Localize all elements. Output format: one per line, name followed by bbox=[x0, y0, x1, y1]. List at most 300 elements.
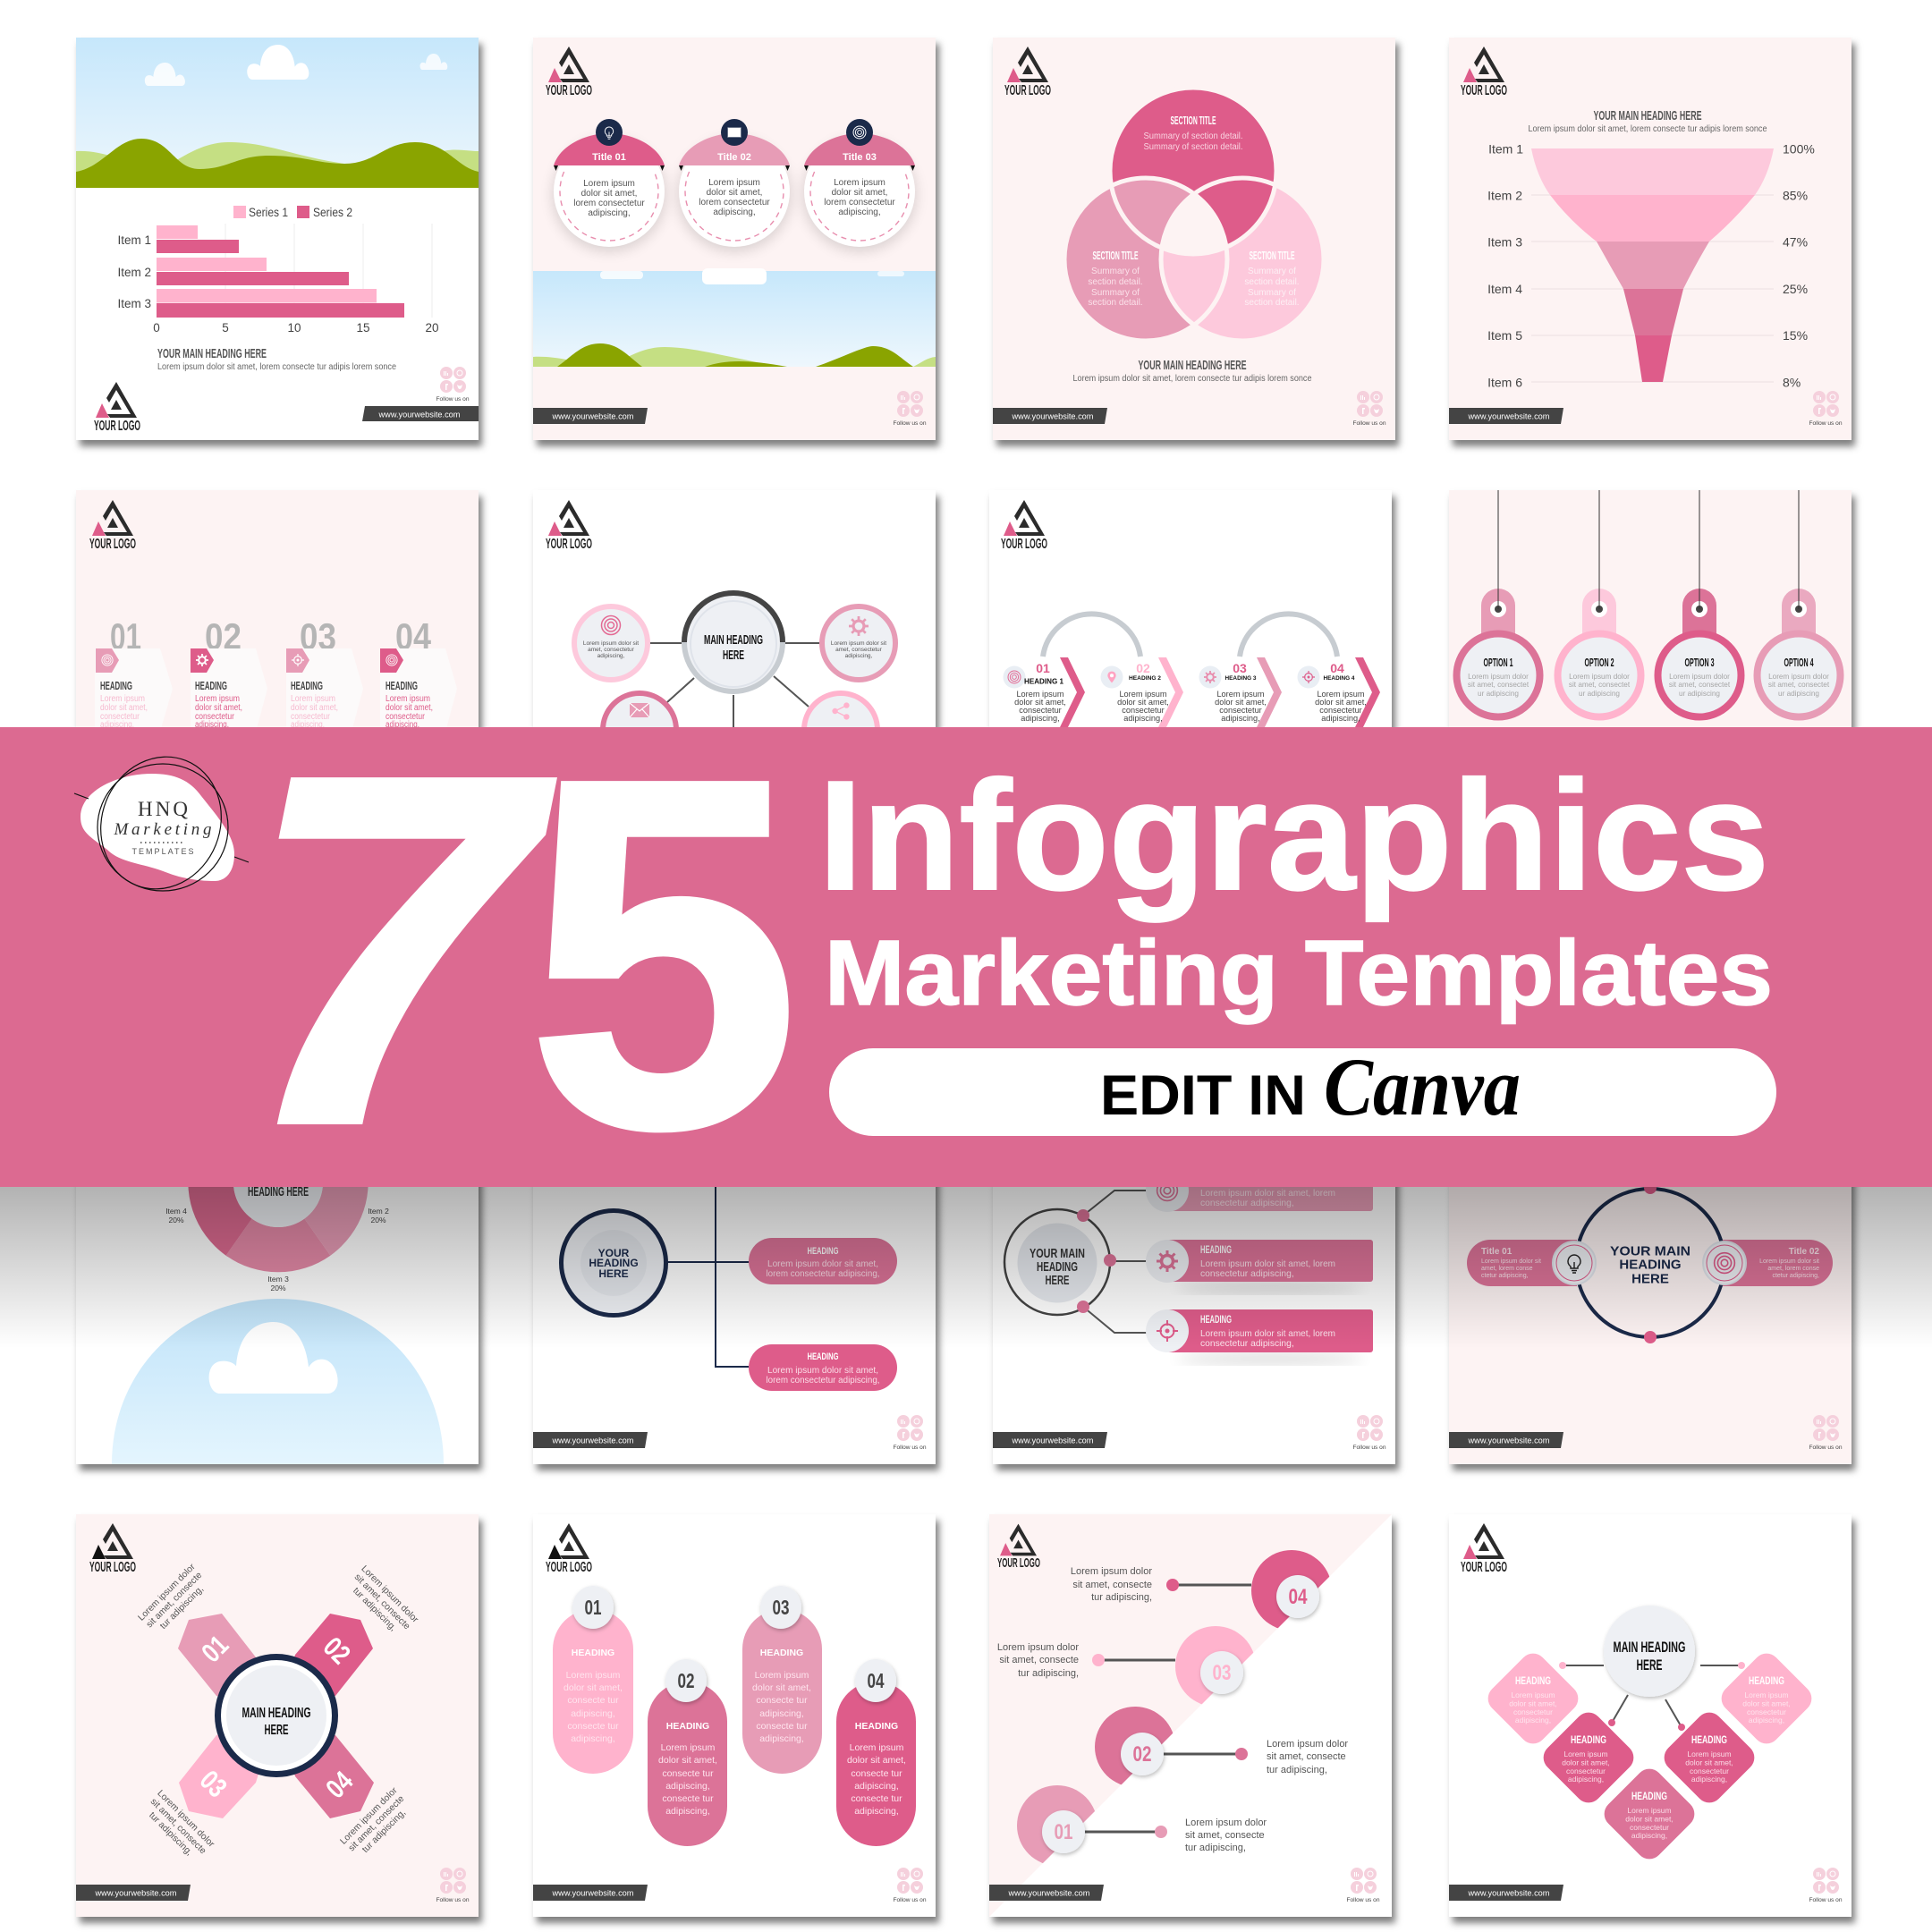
diamond lower left: adipiscing, bbox=[1568, 1775, 1604, 1784]
website bar: www.yourwebsite.com bbox=[1012, 1436, 1094, 1445]
horizontal bar chart bbox=[117, 224, 439, 335]
rotated caption bottom left: tur adipiscing, bbox=[147, 1810, 194, 1858]
section right text: Summary of bbox=[1248, 288, 1296, 298]
funnel percentages: 25% bbox=[1783, 282, 1808, 296]
step 02: tur adipiscing, bbox=[1267, 1765, 1327, 1775]
step 01: sit amet, consecte bbox=[1185, 1830, 1265, 1841]
step 01: tur adipiscing, bbox=[1185, 1843, 1246, 1853]
social icons bbox=[893, 1868, 927, 1903]
website bar bbox=[533, 408, 648, 424]
section top text: SECTION TITLE bbox=[1170, 114, 1216, 127]
step 02: HEADING 2 bbox=[1129, 675, 1161, 682]
funnel percentages: 100% bbox=[1783, 141, 1815, 156]
diamond lower left: Lorem ipsum bbox=[1563, 1750, 1608, 1758]
social icons bbox=[893, 391, 927, 427]
tag option 1: sit amet, consectet bbox=[1468, 681, 1530, 689]
step 02: consectetur bbox=[1122, 706, 1165, 715]
step 1: Lorem ipsum bbox=[100, 694, 145, 704]
tag option 1: OPTION 1 bbox=[1483, 656, 1513, 669]
tag option 4: sit amet, consectet bbox=[1768, 681, 1830, 689]
rotated caption bottom right bbox=[339, 1785, 415, 1862]
diamond left bbox=[1482, 1648, 1584, 1750]
horizontal bar chart: Item 2 bbox=[117, 266, 151, 279]
step 03: dolor sit amet, bbox=[1215, 698, 1267, 707]
social icons: Follow us on bbox=[893, 420, 927, 427]
capsule 01: adipiscing, bbox=[571, 1733, 615, 1744]
bar 1 bbox=[1146, 1169, 1373, 1212]
step 03: tur adipiscing, bbox=[1018, 1668, 1079, 1679]
step 4 bbox=[380, 648, 457, 732]
step 03: adipiscing, bbox=[1221, 714, 1260, 723]
card: capsules template bbox=[533, 1514, 936, 1917]
diamond lower right: dolor sit amet, bbox=[1685, 1758, 1733, 1767]
capsule 04: HEADING bbox=[855, 1721, 898, 1732]
rotated caption top right: sit amet, consecte bbox=[352, 1572, 411, 1631]
rotated caption top right: tur adipiscing, bbox=[351, 1586, 398, 1633]
social icons: Follow us on bbox=[1809, 420, 1843, 427]
central circle: HERE bbox=[1045, 1273, 1070, 1288]
diamond bottom bbox=[1598, 1763, 1700, 1865]
sky dome with cloud bbox=[112, 1299, 444, 1464]
website bar bbox=[989, 1885, 1104, 1901]
diamond right: consectetur bbox=[1747, 1707, 1786, 1716]
brand badge: Marketing bbox=[113, 820, 211, 839]
step 03: 03 bbox=[1213, 1661, 1231, 1685]
step 01: Lorem ipsum dolor bbox=[1185, 1818, 1267, 1828]
left node bbox=[574, 606, 648, 680]
large step numbers: 01 bbox=[110, 615, 141, 657]
banner drop shadow bbox=[0, 1187, 1932, 1348]
horizontal bar chart: 0 bbox=[153, 321, 160, 335]
logo: YOUR LOGO bbox=[1461, 1560, 1507, 1575]
step 04: tur adipiscing, bbox=[1091, 1592, 1152, 1603]
funnel percentages: 85% bbox=[1783, 188, 1808, 202]
arm 01 bbox=[178, 1614, 276, 1716]
diamond lower right bbox=[1658, 1707, 1760, 1809]
step 1: consectetur bbox=[100, 712, 140, 722]
bar 1: Lorem ipsum dolor sit amet, lorem bbox=[1200, 1189, 1335, 1199]
section top text: Summary of section detail. bbox=[1143, 131, 1243, 141]
step 03: Lorem ipsum dolor bbox=[997, 1642, 1079, 1653]
step 2 bbox=[191, 648, 267, 732]
capsule 01: Lorem ipsum bbox=[566, 1670, 621, 1681]
card: cross arms template bbox=[76, 1514, 479, 1917]
logo bbox=[1001, 500, 1047, 552]
tag option 2: ur adipiscing bbox=[1579, 690, 1620, 698]
circle 1: adipiscing, bbox=[588, 208, 631, 218]
step 01: Lorem ipsum bbox=[1016, 690, 1064, 699]
website bar bbox=[993, 1432, 1107, 1448]
capsule 02: dolor sit amet, bbox=[658, 1755, 717, 1766]
capsule 03: adipiscing, bbox=[759, 1708, 804, 1719]
tag option 3: OPTION 3 bbox=[1685, 656, 1714, 669]
funnel percentages: 15% bbox=[1783, 328, 1808, 343]
step 04: Lorem ipsum bbox=[1317, 690, 1365, 699]
bar 3 bbox=[1146, 1309, 1373, 1363]
diamond left: dolor sit amet, bbox=[1509, 1699, 1557, 1708]
bar 1: consectetur adipiscing, bbox=[1200, 1199, 1294, 1208]
brand badge bbox=[74, 739, 249, 907]
capsule 03: dolor sit amet, bbox=[752, 1682, 811, 1693]
diamond lower left bbox=[1538, 1707, 1640, 1809]
diagonal background bbox=[989, 1514, 1392, 1917]
right node: Lorem ipsum dolor sit bbox=[831, 640, 886, 647]
heading text bbox=[1528, 108, 1767, 134]
arm 04 bbox=[276, 1716, 374, 1818]
step 4: HEADING bbox=[386, 679, 418, 692]
tag option 3: Lorem ipsum dolor bbox=[1669, 673, 1730, 681]
step 04: sit amet, consecte bbox=[1072, 1580, 1152, 1590]
bar 2: HEADING bbox=[1200, 1243, 1232, 1256]
pill 2: Lorem ipsum dolor sit amet, bbox=[767, 1366, 878, 1376]
card: diagonal steps template bbox=[989, 1514, 1392, 1917]
right node bbox=[822, 606, 895, 680]
capsule 04: Lorem ipsum bbox=[850, 1742, 904, 1753]
left tab: ctetur adipiscing, bbox=[1481, 1273, 1529, 1279]
call to action pill: Canva bbox=[1324, 1041, 1521, 1132]
step 01: consectetur bbox=[1019, 706, 1062, 715]
capsule 01: consecte tur bbox=[567, 1721, 619, 1732]
heading text: YOUR MAIN HEADING HERE bbox=[157, 346, 267, 361]
pill 1: Lorem ipsum dolor sit amet, bbox=[767, 1259, 878, 1269]
social icons bbox=[1809, 391, 1843, 427]
section right text: Summary of bbox=[1248, 267, 1296, 276]
funnel item labels: Item 4 bbox=[1487, 282, 1522, 296]
step 4: consectetur bbox=[386, 712, 426, 722]
heading text bbox=[1073, 358, 1312, 384]
rotated caption top left: Lorem ipsum dolor bbox=[137, 1562, 198, 1623]
step 4: dolor sit amet, bbox=[386, 703, 433, 713]
horizontal bar chart: 10 bbox=[287, 321, 301, 335]
subtitle: Marketing Templates: Marketing Templates bbox=[825, 921, 1773, 1024]
step 02 bbox=[1095, 1707, 1348, 1787]
horizontal bar chart: Item 1 bbox=[117, 233, 151, 247]
section top text bbox=[1143, 114, 1243, 152]
capsule 03 bbox=[742, 1586, 822, 1774]
step 01: HEADING 1 bbox=[1024, 678, 1064, 685]
capsule 01: HEADING bbox=[572, 1648, 614, 1658]
rotated caption top left: tur adipiscing, bbox=[158, 1584, 206, 1631]
diamond left: HEADING bbox=[1515, 1674, 1551, 1687]
tag option 2: Lorem ipsum dolor bbox=[1569, 673, 1630, 681]
heading text: YOUR MAIN HEADING HERE bbox=[1138, 358, 1247, 373]
step 2: dolor sit amet, bbox=[195, 703, 242, 713]
diamond left: consectetur bbox=[1513, 1707, 1553, 1716]
social icons: Follow us on bbox=[1346, 1897, 1380, 1903]
ring heading: HERE bbox=[1631, 1272, 1669, 1286]
card: central ring template bbox=[1449, 1062, 1852, 1464]
diamond lower right: Lorem ipsum bbox=[1687, 1750, 1732, 1758]
tag option 2 bbox=[1558, 490, 1640, 717]
logo bbox=[546, 1523, 592, 1575]
capsule 04: consecte tur bbox=[851, 1768, 902, 1779]
section right text bbox=[1244, 249, 1300, 308]
social icons bbox=[1352, 1415, 1386, 1451]
section top text: Summary of section detail. bbox=[1143, 142, 1243, 152]
central circle bbox=[1004, 1209, 1116, 1315]
logo: YOUR LOGO bbox=[89, 537, 136, 552]
circle 3 bbox=[804, 119, 915, 247]
donut labels: Item 4 bbox=[165, 1207, 187, 1216]
section left text: section detail. bbox=[1088, 298, 1143, 308]
section left text: Summary of bbox=[1091, 288, 1140, 298]
circle 3: dolor sit amet, bbox=[832, 188, 887, 198]
central circle: HEADING bbox=[589, 1257, 639, 1269]
rotated caption bottom left: Lorem ipsum dolor bbox=[155, 1789, 216, 1850]
connector lines bbox=[649, 643, 819, 741]
website bar: www.yourwebsite.com bbox=[1012, 411, 1094, 420]
diamond lower right: HEADING bbox=[1691, 1733, 1727, 1746]
diamond right: adipiscing, bbox=[1749, 1716, 1784, 1724]
tag option 4: ur adipiscing bbox=[1778, 690, 1819, 698]
logo: YOUR LOGO bbox=[89, 1560, 136, 1575]
step 03: 03 bbox=[1233, 661, 1247, 675]
bar 3: HEADING bbox=[1200, 1313, 1232, 1326]
right tab: amet, lorem conse bbox=[1767, 1266, 1819, 1272]
tag option 1 bbox=[1456, 490, 1540, 717]
social icons bbox=[436, 1868, 470, 1903]
step 4: adipiscing, bbox=[386, 720, 419, 730]
left tab: Lorem ipsum dolor sit bbox=[1481, 1258, 1541, 1265]
logo bbox=[546, 500, 592, 552]
step 01: dolor sit amet, bbox=[1014, 698, 1066, 707]
donut chart: HEADING HERE bbox=[248, 1184, 309, 1199]
website bar bbox=[993, 408, 1107, 424]
circle 2 bbox=[679, 119, 790, 247]
horizontal bar chart: 15 bbox=[356, 321, 370, 335]
central circle bbox=[218, 1657, 335, 1775]
large step numbers: 04 bbox=[395, 615, 432, 657]
step 02: Lorem ipsum bbox=[1119, 690, 1167, 699]
central disc: HERE bbox=[1637, 1657, 1662, 1674]
website bar: www.yourwebsite.com bbox=[1468, 411, 1550, 420]
step 02: 02 bbox=[1132, 1742, 1152, 1767]
bar 3: consectetur adipiscing, bbox=[1200, 1339, 1294, 1349]
circle 1: lorem consectetur bbox=[573, 199, 645, 208]
left node: adipiscing, bbox=[597, 653, 625, 659]
funnel percentages bbox=[1783, 141, 1815, 390]
step 04 bbox=[1071, 1550, 1332, 1631]
circle 3: adipiscing, bbox=[838, 208, 881, 217]
right node: adipiscing, bbox=[845, 653, 873, 659]
website bar: www.yourwebsite.com bbox=[552, 1889, 634, 1898]
donut labels: Item 2 bbox=[368, 1207, 389, 1216]
right tab: Lorem ipsum dolor sit bbox=[1759, 1258, 1819, 1265]
logo bbox=[89, 1523, 136, 1575]
card: hanging tags template bbox=[1449, 490, 1852, 893]
circle 1 bbox=[554, 119, 665, 247]
arm 04: 04 bbox=[319, 1765, 360, 1804]
tag option 3 bbox=[1658, 490, 1741, 717]
diamond lower left: consectetur bbox=[1566, 1767, 1606, 1775]
capsule 02: Lorem ipsum bbox=[661, 1742, 716, 1753]
rotated caption top right: Lorem ipsum dolor bbox=[359, 1564, 420, 1625]
step 04: dolor sit amet, bbox=[1315, 698, 1367, 707]
tag option 3: sit amet, consectet bbox=[1669, 681, 1731, 689]
central disc: MAIN HEADING bbox=[1614, 1639, 1685, 1656]
connecting arcs bbox=[1043, 614, 1337, 657]
central circle: HERE bbox=[265, 1723, 289, 1738]
capsule 04: 04 bbox=[868, 1669, 885, 1692]
legend: Series 2 bbox=[313, 205, 352, 219]
tag option 4 bbox=[1757, 490, 1841, 717]
lower right node bbox=[804, 693, 877, 767]
social icons bbox=[436, 367, 470, 402]
circle 1: dolor sit amet, bbox=[581, 189, 637, 199]
arm 01: 01 bbox=[195, 1629, 234, 1668]
donut chart bbox=[188, 1138, 369, 1272]
horizontal bar chart: 20 bbox=[425, 321, 439, 335]
step 02: Lorem ipsum dolor bbox=[1267, 1739, 1348, 1750]
funnel percentages: 8% bbox=[1783, 376, 1801, 390]
website bar bbox=[1449, 1432, 1563, 1448]
step 3 bbox=[286, 648, 363, 732]
capsule 03: HEADING bbox=[760, 1648, 803, 1658]
logo bbox=[1461, 47, 1507, 98]
website bar bbox=[362, 406, 479, 421]
social icons: Follow us on bbox=[436, 1897, 470, 1903]
step 04 bbox=[1297, 661, 1367, 723]
social icons bbox=[1809, 1868, 1843, 1903]
navy ring bbox=[1576, 1182, 1724, 1343]
step 03 bbox=[1199, 661, 1267, 723]
right node: amet, consectetur bbox=[835, 647, 883, 653]
rotated caption top right bbox=[343, 1564, 420, 1640]
capsule 04 bbox=[836, 1659, 916, 1846]
diamond lower right: adipiscing, bbox=[1691, 1775, 1727, 1784]
step 01 bbox=[1004, 661, 1066, 723]
website bar bbox=[533, 1885, 648, 1901]
card: bar chart template bbox=[76, 38, 479, 440]
social icons: Follow us on bbox=[893, 1445, 927, 1451]
brand badge: TEMPLATES bbox=[132, 847, 193, 856]
large step numbers: 03 bbox=[300, 615, 336, 657]
big number 75: 7 bbox=[180, 673, 599, 1227]
capsule 03: adipiscing, bbox=[759, 1733, 804, 1744]
capsule 03: Lorem ipsum bbox=[755, 1670, 809, 1681]
arm 03 bbox=[179, 1716, 276, 1818]
logo bbox=[1461, 1523, 1507, 1575]
capsule 01: 01 bbox=[585, 1596, 602, 1619]
logo: YOUR LOGO bbox=[546, 1560, 592, 1575]
diamond right bbox=[1716, 1648, 1818, 1750]
card: branching bars template bbox=[993, 1062, 1395, 1464]
step 1: adipiscing, bbox=[100, 720, 134, 730]
brand badge: HNQ bbox=[138, 798, 188, 820]
step 02: dolor sit amet, bbox=[1117, 698, 1169, 707]
card: diamonds template bbox=[1449, 1514, 1852, 1917]
funnel chart bbox=[1531, 148, 1774, 382]
central circle: YOUR bbox=[598, 1247, 630, 1259]
circle 2: dolor sit amet, bbox=[707, 188, 762, 198]
connector lines bbox=[667, 1178, 749, 1367]
donut labels bbox=[165, 1207, 389, 1292]
arm 02 bbox=[276, 1614, 373, 1716]
step 03: consectetur bbox=[1219, 706, 1262, 715]
large step numbers: 02 bbox=[205, 615, 242, 657]
step 04: HEADING 4 bbox=[1324, 675, 1355, 682]
capsule 02: 02 bbox=[678, 1669, 694, 1692]
pill 1: lorem consectetur adipiscing, bbox=[766, 1269, 880, 1279]
diamond bottom: HEADING bbox=[1631, 1790, 1667, 1802]
card: three circles template bbox=[533, 38, 936, 440]
circle 3: lorem consectetur bbox=[824, 198, 895, 208]
central circle: MAIN HEADING bbox=[704, 633, 763, 648]
step 02: adipiscing, bbox=[1123, 714, 1163, 723]
circle 3: Lorem ipsum bbox=[834, 178, 886, 188]
capsule 01 bbox=[553, 1586, 633, 1774]
website bar: www.yourwebsite.com bbox=[378, 410, 461, 419]
card: numbered steps template bbox=[76, 490, 479, 893]
step 4: Lorem ipsum bbox=[386, 694, 430, 704]
right tab bbox=[1703, 1240, 1833, 1286]
capsule 02: consecte tur bbox=[662, 1793, 714, 1804]
website bar: www.yourwebsite.com bbox=[95, 1889, 177, 1898]
step 01 bbox=[1017, 1785, 1267, 1866]
website bar bbox=[1449, 408, 1563, 424]
bar 3: Lorem ipsum dolor sit amet, lorem bbox=[1200, 1329, 1335, 1339]
social icons: Follow us on bbox=[1352, 420, 1386, 427]
step 02: sit amet, consecte bbox=[1267, 1751, 1346, 1762]
funnel percentages: 47% bbox=[1783, 234, 1808, 249]
logo bbox=[94, 382, 140, 434]
ring heading: YOUR MAIN bbox=[1610, 1243, 1690, 1259]
step 01: adipiscing, bbox=[1021, 714, 1060, 723]
tag option 2: OPTION 2 bbox=[1585, 656, 1614, 669]
funnel item labels: Item 3 bbox=[1487, 234, 1522, 249]
step 2: Lorem ipsum bbox=[195, 694, 240, 704]
card: hub and spoke template bbox=[533, 490, 936, 893]
central circle: HERE bbox=[723, 648, 744, 663]
step 3: consectetur bbox=[291, 712, 331, 722]
donut labels: 20% bbox=[168, 1216, 184, 1224]
website bar bbox=[533, 1432, 648, 1448]
step 2: consectetur bbox=[195, 712, 235, 722]
step 03: HEADING 3 bbox=[1225, 675, 1257, 682]
step 03: sit amet, consecte bbox=[999, 1655, 1079, 1665]
capsule 04: adipiscing, bbox=[854, 1806, 899, 1817]
ring heading: HEADING bbox=[1619, 1258, 1682, 1272]
heading text: Lorem ipsum dolor sit amet, lorem consecte tur adipis lorem sonce bbox=[1528, 124, 1767, 134]
title: Infographics: Infographics bbox=[818, 748, 1769, 922]
rotated caption bottom right: Lorem ipsum dolor bbox=[339, 1785, 400, 1847]
left tab: amet, lorem conse bbox=[1481, 1266, 1533, 1272]
step 04: 04 bbox=[1330, 661, 1344, 675]
logo: YOUR LOGO bbox=[1001, 537, 1047, 552]
step 04: consectetur bbox=[1319, 706, 1362, 715]
section left text bbox=[1088, 249, 1143, 308]
step 1 bbox=[95, 648, 173, 732]
step 2: adipiscing, bbox=[195, 720, 229, 730]
social icons bbox=[1809, 1415, 1843, 1451]
ring heading bbox=[1610, 1243, 1690, 1286]
step 3: adipiscing, bbox=[291, 720, 325, 730]
central disc bbox=[1604, 1606, 1695, 1697]
capsule 02: adipiscing, bbox=[665, 1806, 710, 1817]
social icons: Follow us on bbox=[436, 396, 470, 402]
social icons bbox=[893, 1415, 927, 1451]
circle 2: adipiscing, bbox=[713, 208, 756, 217]
website bar bbox=[1449, 1885, 1563, 1901]
donut labels: 20% bbox=[270, 1284, 286, 1292]
tag option 2: sit amet, consectet bbox=[1569, 681, 1631, 689]
legend bbox=[233, 205, 352, 219]
rotated caption bottom left: sit amet, consecte bbox=[148, 1797, 208, 1856]
circle 3: Title 03 bbox=[843, 152, 877, 163]
chevrons bbox=[1060, 657, 1380, 727]
step 04: Lorem ipsum dolor bbox=[1071, 1566, 1152, 1577]
step 03 bbox=[997, 1626, 1256, 1707]
